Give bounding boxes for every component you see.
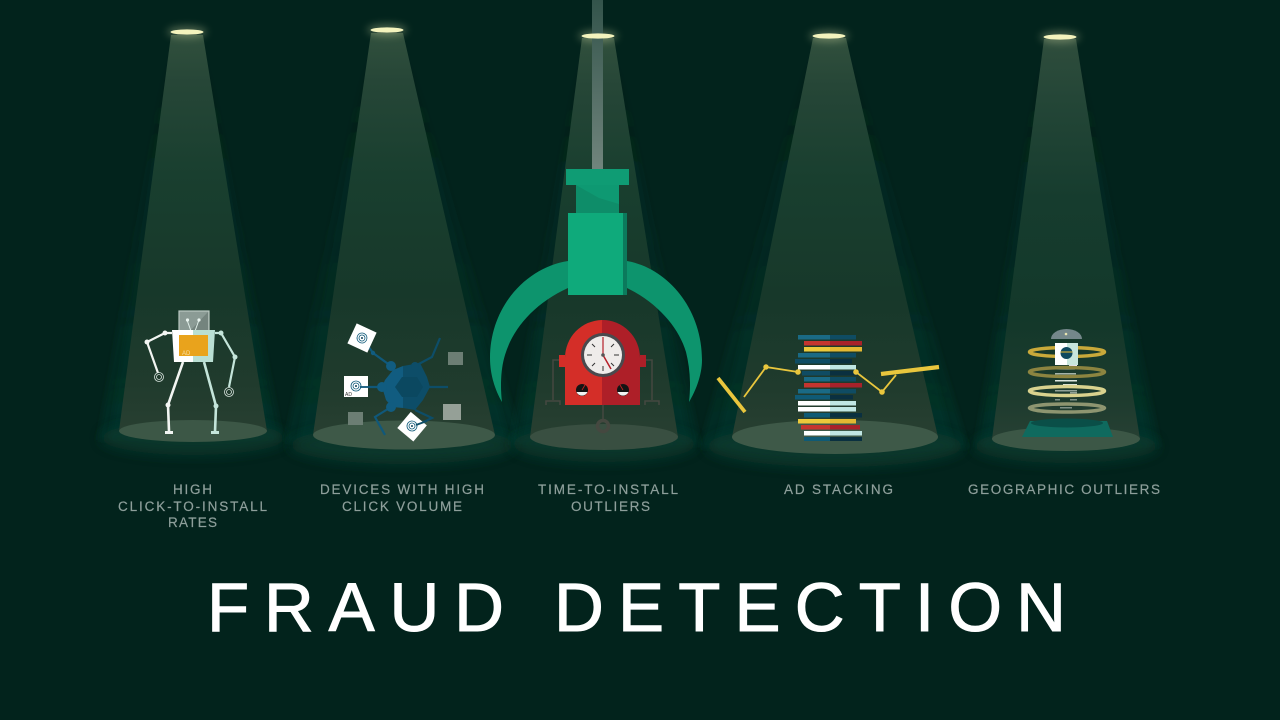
pendulum	[598, 405, 608, 432]
claw main block	[568, 213, 627, 295]
label: time-to-install outliers	[538, 482, 678, 514]
robot head screen	[179, 311, 209, 333]
robot joints	[144, 330, 238, 434]
label: high click-to-install rates	[118, 482, 267, 530]
spider body	[371, 351, 430, 412]
label: high click-to-install rates: CLICK-TO-INSTALL	[118, 499, 267, 514]
title: FRAUD	[207, 569, 504, 646]
right limbs	[204, 333, 235, 432]
spider legs	[360, 338, 448, 435]
label: time-to-install outliers: OUTLIERS	[571, 499, 650, 514]
label: devices with high click volume: DEVICES WITH HIGH	[320, 482, 484, 497]
lamp 3	[582, 33, 614, 39]
dome	[1051, 329, 1082, 339]
left arm	[718, 364, 801, 412]
ring 3	[1030, 386, 1104, 396]
clock face	[581, 333, 625, 377]
clock robot eyes	[576, 384, 629, 396]
title	[207, 569, 1066, 646]
data dashes	[1055, 368, 1077, 408]
ring 2	[1030, 368, 1104, 376]
robot hands	[154, 372, 234, 396]
claw	[490, 0, 702, 402]
title: DETECTION	[554, 569, 1066, 646]
robot: clock	[546, 320, 659, 432]
label: time-to-install outliers: TIME-TO-INSTALL	[538, 482, 678, 497]
right arm	[853, 367, 939, 395]
white ad card bottom	[397, 412, 427, 441]
body	[1055, 343, 1078, 366]
label: high click-to-install rates: RATES	[168, 515, 217, 530]
spotlight 2	[285, 24, 522, 464]
clock robot arms	[546, 360, 659, 405]
robot: device click spider	[344, 323, 463, 441]
robot body: AD	[182, 351, 191, 357]
clock robot body	[565, 320, 640, 405]
label: devices with high click volume: CLICK VOLUME	[342, 499, 462, 514]
clock robot ears	[559, 355, 646, 367]
robot: geographic rings	[1022, 329, 1113, 437]
ring back	[1030, 348, 1104, 356]
spotlight 5	[974, 31, 1160, 463]
claw rod	[592, 0, 603, 170]
grey ad cards	[348, 352, 463, 425]
label: high click-to-install rates: HIGH	[173, 482, 212, 497]
label: geographic outliers: GEOGRAPHIC OUTLIERS	[968, 482, 1160, 497]
claw neck	[576, 185, 619, 214]
book stack	[795, 335, 862, 441]
claw top bar	[566, 169, 629, 185]
ring 4	[1030, 404, 1104, 412]
spotlight 4	[700, 30, 968, 467]
label: ad stacking: AD STACKING	[784, 482, 893, 497]
spotlight 3	[510, 30, 700, 462]
left limbs	[147, 333, 183, 431]
claw left pincer	[490, 261, 568, 402]
claw right pincer	[627, 261, 702, 402]
base	[1022, 418, 1113, 437]
spotlight 1	[98, 26, 285, 455]
robot: click-to-install skeleton	[144, 311, 238, 434]
white ad card left: AD	[345, 392, 352, 398]
white ad card top	[347, 323, 377, 353]
label: devices with high click volume	[320, 482, 484, 514]
robot: ad stacking books	[718, 335, 939, 441]
